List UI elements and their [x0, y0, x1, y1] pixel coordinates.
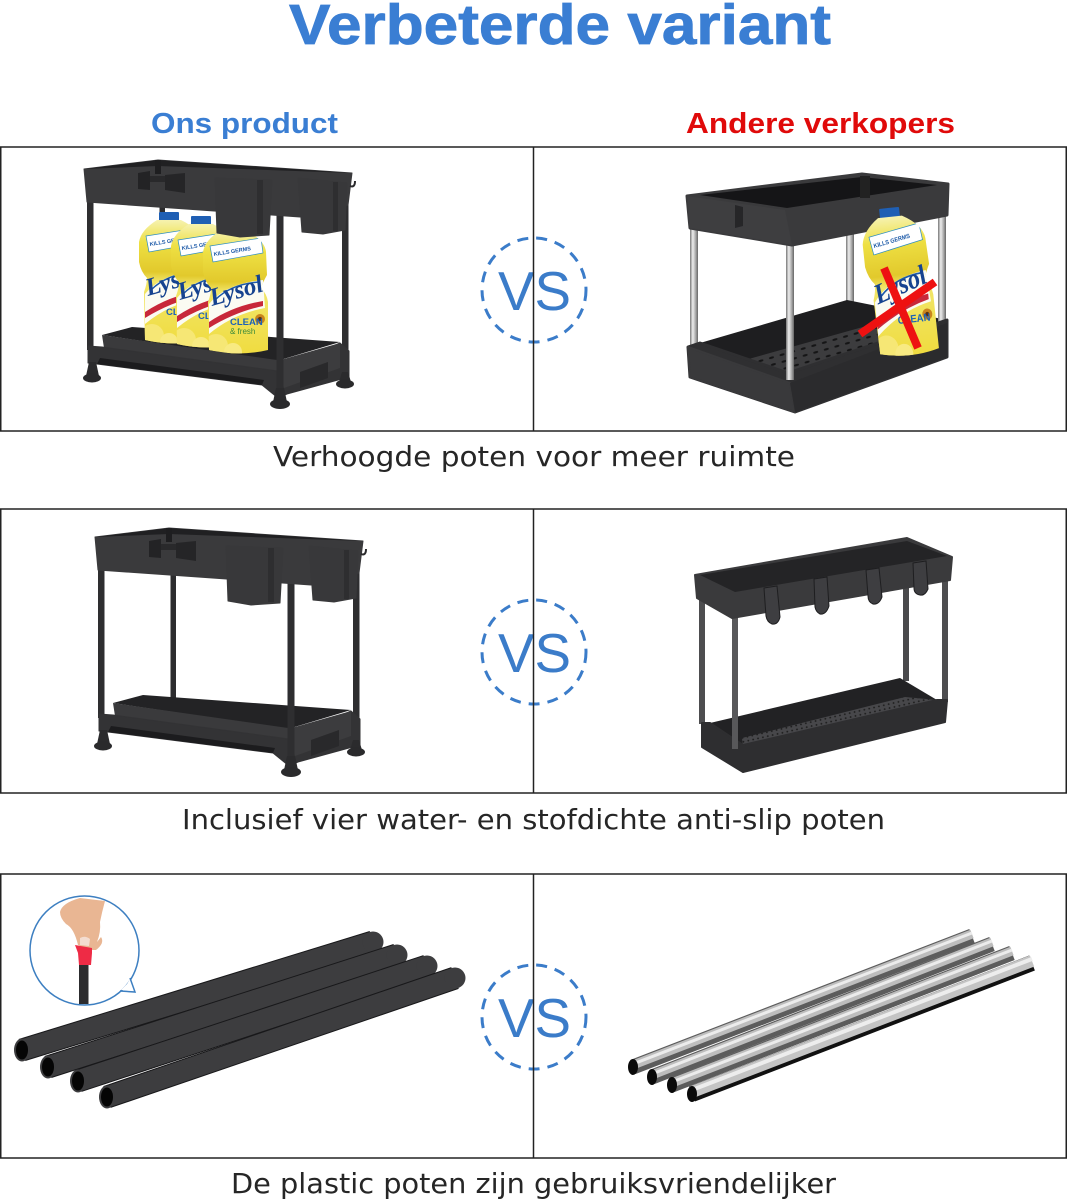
competitor: four chrome tubes: [628, 933, 1032, 1102]
product: rack with three bottles: [83, 160, 355, 409]
product: rack with three bottles: KILLS GERMS: [213, 246, 252, 258]
product: rack with three bottles: CLEAN: [166, 307, 199, 318]
product: rack with three bottles: Lysol: [205, 271, 266, 312]
competitor: chrome leg rack with bottle: CLEAN: [897, 312, 931, 327]
product: rack with three bottles: CLEAN: [230, 317, 263, 328]
competitor: chrome leg rack with bottle: [687, 174, 948, 412]
heading: Ons product: Ons product: [151, 108, 338, 140]
divider with VS badge: VS: [498, 622, 571, 684]
product: rack with three bottles: & fresh: [230, 327, 255, 336]
caption row 2: Inclusief vier water- en stofdichte anti-slip poten: [182, 803, 885, 836]
callout: hand pulling red cap: [30, 896, 139, 1005]
caption row 3: De plastic poten zijn gebruiksvriendelijker: [231, 1167, 837, 1200]
product: four black plastic tubes: [14, 932, 466, 1108]
product: rack with three bottles: Lysol: [173, 265, 234, 306]
product: rack with three bottles: KILLS GERMS: [181, 240, 220, 252]
panel: comparison row 1: [1, 147, 1066, 431]
divider with VS badge: [482, 509, 586, 793]
competitor: chrome leg rack with bottle: Lysol: [868, 258, 931, 311]
divider with VS badge: [482, 147, 586, 431]
heading: Andere verkopers: Andere verkopers: [686, 108, 955, 140]
competitor: chrome leg rack with bottle: KILLS GERMS: [873, 234, 911, 250]
panel: comparison row 3: [1, 874, 1066, 1158]
divider with VS badge: VS: [498, 260, 571, 322]
divider with VS badge: [482, 874, 586, 1158]
competitor: rack with hooks: [695, 538, 952, 772]
divider with VS badge: VS: [498, 987, 571, 1049]
caption row 1: Verhoogde poten voor meer ruimte: [273, 440, 795, 473]
product: rack with anti-slip feet: [94, 528, 366, 777]
product: rack with three bottles: CLEAN: [198, 311, 231, 322]
product: rack with three bottles: Lysol: [141, 261, 202, 302]
product: rack with three bottles: KILLS GERMS: [149, 236, 188, 248]
red cross: [860, 268, 935, 348]
panel: comparison row 2: [1, 509, 1066, 793]
